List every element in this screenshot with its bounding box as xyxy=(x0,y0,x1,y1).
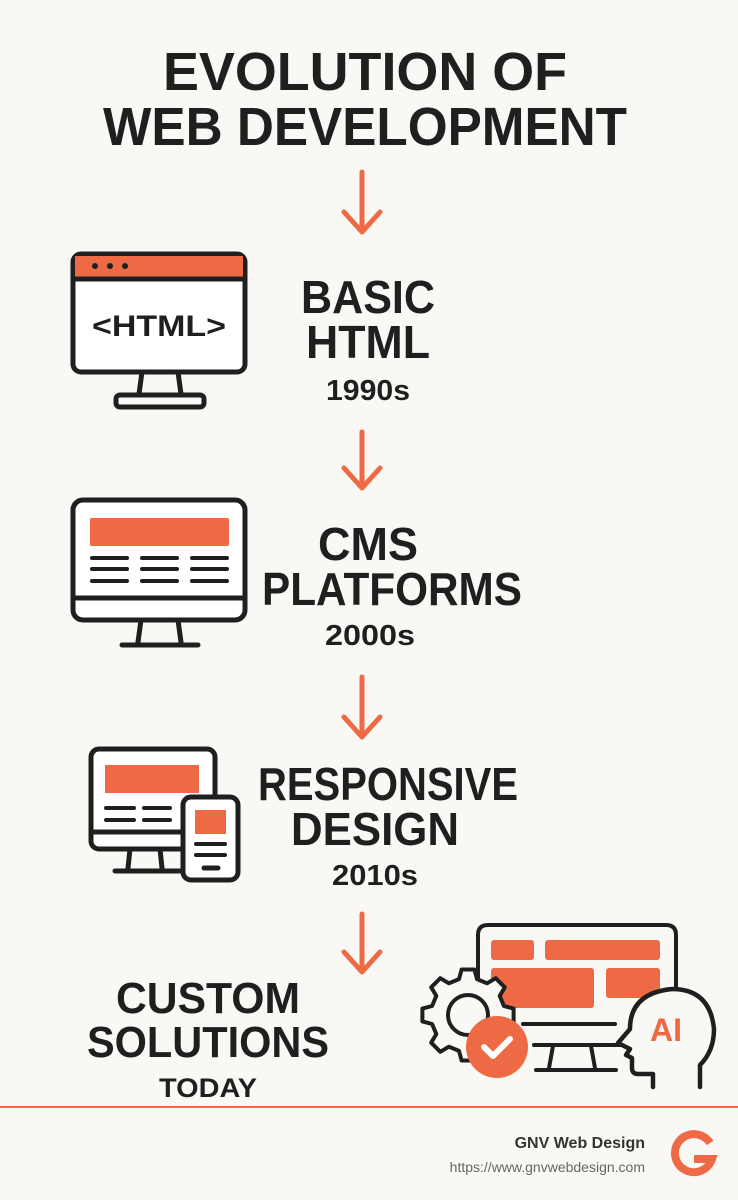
footer brand xyxy=(450,1135,645,1175)
arrow 3 xyxy=(344,677,380,737)
text: cms platforms: 2000s xyxy=(325,620,415,652)
text: basic html: 1990s xyxy=(326,375,410,407)
text: responsive design xyxy=(258,758,518,892)
footer brand: https://www.gnvwebdesign.com xyxy=(450,1159,645,1175)
icon: logo G xyxy=(675,1134,712,1172)
icon: responsive devices xyxy=(91,749,238,880)
head xyxy=(618,989,714,1087)
text: cms platforms: CMS xyxy=(318,518,418,570)
icon: custom solutions illustration xyxy=(422,925,714,1087)
title: WEB DEVELOPMENT xyxy=(103,97,627,157)
arrow 2 xyxy=(344,432,380,488)
footer brand: GNV Web Design xyxy=(515,1135,645,1152)
text: responsive design: RESPONSIVE xyxy=(258,758,518,810)
text: custom solutions: CUSTOM xyxy=(116,974,300,1023)
text: cms platforms xyxy=(262,518,522,652)
text: custom solutions xyxy=(87,974,329,1103)
text: cms platforms: PLATFORMS xyxy=(262,563,522,615)
arrow 1 xyxy=(344,172,380,232)
arrow 4 xyxy=(344,914,380,972)
icon: custom solutions illustration: AI xyxy=(650,1012,682,1048)
gear xyxy=(422,970,514,1060)
title: EVOLUTION OF xyxy=(163,42,567,102)
text: basic html: BASIC xyxy=(301,271,435,323)
title xyxy=(103,42,627,157)
icon: cms monitor xyxy=(73,500,245,645)
text: responsive design: 2010s xyxy=(332,860,418,892)
icon: html monitor xyxy=(73,254,245,407)
text: custom solutions: SOLUTIONS xyxy=(87,1018,329,1067)
text: basic html: HTML xyxy=(306,316,430,368)
icon: html monitor: <HTML> xyxy=(92,310,226,343)
divider xyxy=(0,1106,738,1108)
text: basic html xyxy=(301,271,435,407)
text: responsive design: DESIGN xyxy=(291,803,459,855)
text: custom solutions: TODAY xyxy=(159,1073,257,1103)
